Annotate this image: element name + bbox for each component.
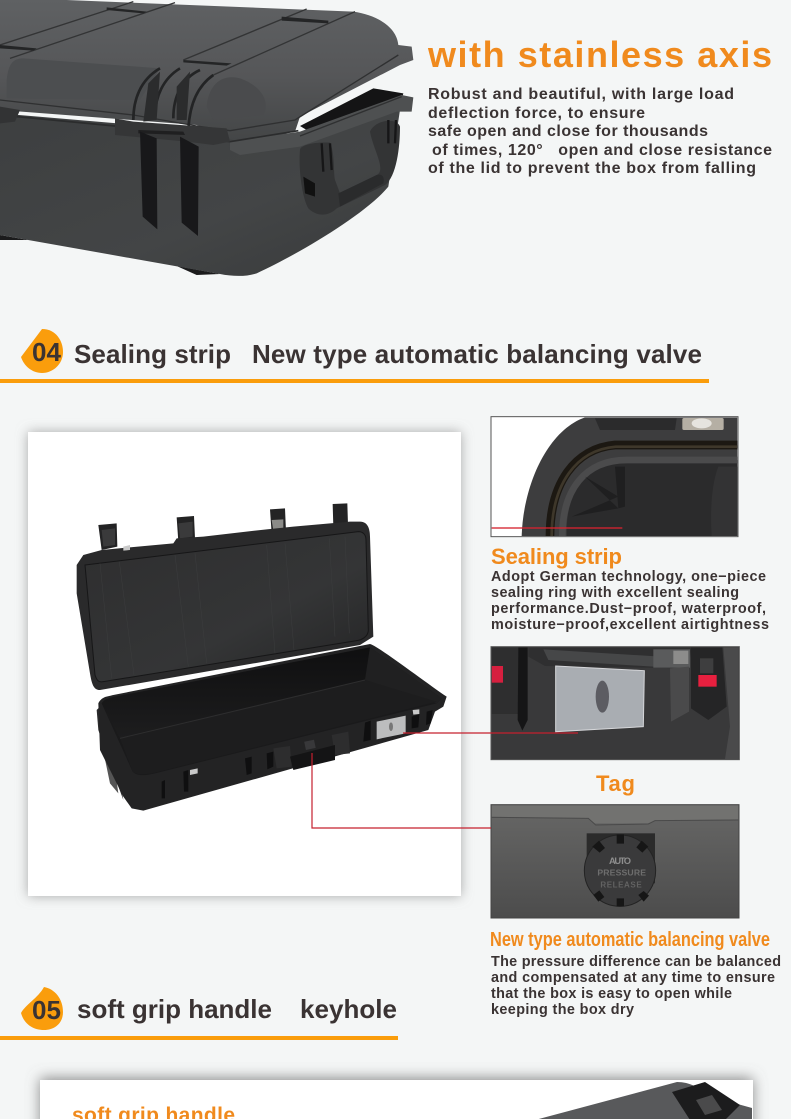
photo: automatic balancing valve detail: PRESSURE <box>597 868 646 878</box>
photo: sealing strip detail <box>491 417 738 537</box>
text block: stainless axis description: safe open and close for thousands <box>428 123 708 140</box>
icon: section 05 badge: 05 <box>32 995 61 1025</box>
text block: valve description: keeping the box dry <box>491 1002 634 1018</box>
photo: case corner <box>535 1082 752 1119</box>
text block: stainless axis description: of times, 120° open and close resistance <box>432 142 772 159</box>
text block: valve description: and compensated at any time to ensure <box>491 970 775 986</box>
panel: open case <box>28 432 461 896</box>
icon: section 04 badge: 04 <box>32 337 62 367</box>
text block: sealing strip description: Adopt German technology, one−piece <box>491 569 766 585</box>
text block: stainless axis description: of the lid to prevent the box from falling <box>428 160 756 177</box>
photo: tag holder detail <box>491 647 739 760</box>
heading: tag: Tag <box>596 771 635 796</box>
text block: stainless axis description: deflection force, to ensure <box>428 105 645 122</box>
heading: section 04: New type automatic balancing valve <box>252 339 702 369</box>
photo: automatic balancing valve detail: RELEASE <box>600 880 642 889</box>
heading: section 05: soft grip handle <box>77 994 272 1024</box>
text block: stainless axis description <box>428 86 772 177</box>
connector: red leader lines <box>312 733 578 828</box>
divider: section 05 underline <box>0 1036 398 1040</box>
text block: sealing strip description: moisture−proof,excellent airtightness <box>491 617 769 633</box>
text block: sealing strip description: sealing ring with excellent sealing <box>491 585 739 601</box>
text block: valve description: that the box is easy to open while <box>491 986 732 1002</box>
heading: with stainless axis: with stainless axis <box>427 34 772 75</box>
text block: stainless axis description: Robust and beautiful, with large load <box>428 86 734 103</box>
photo: open case <box>77 503 447 811</box>
text block: valve description <box>491 954 781 1018</box>
text block: sealing strip description <box>491 569 769 633</box>
photo: closed case with stainless axis <box>0 0 413 276</box>
heading: section 05 <box>77 994 397 1024</box>
photo: automatic balancing valve detail <box>491 805 739 918</box>
icon: section 04 badge <box>21 329 63 373</box>
icon: section 05 badge <box>21 987 63 1030</box>
text block: valve description: The pressure difference can be balanced <box>491 954 781 970</box>
heading: section 05: keyhole <box>300 994 397 1024</box>
heading: sealing strip: Sealing strip <box>491 544 622 569</box>
photo: automatic balancing valve detail: AUTO <box>609 856 631 866</box>
panel: soft grip handle <box>40 1080 753 1119</box>
divider: section 04 underline <box>0 379 709 383</box>
text block: sealing strip description: performance.Dust−proof, waterproof, <box>491 601 766 617</box>
heading: section 04: Sealing strip <box>74 339 231 369</box>
